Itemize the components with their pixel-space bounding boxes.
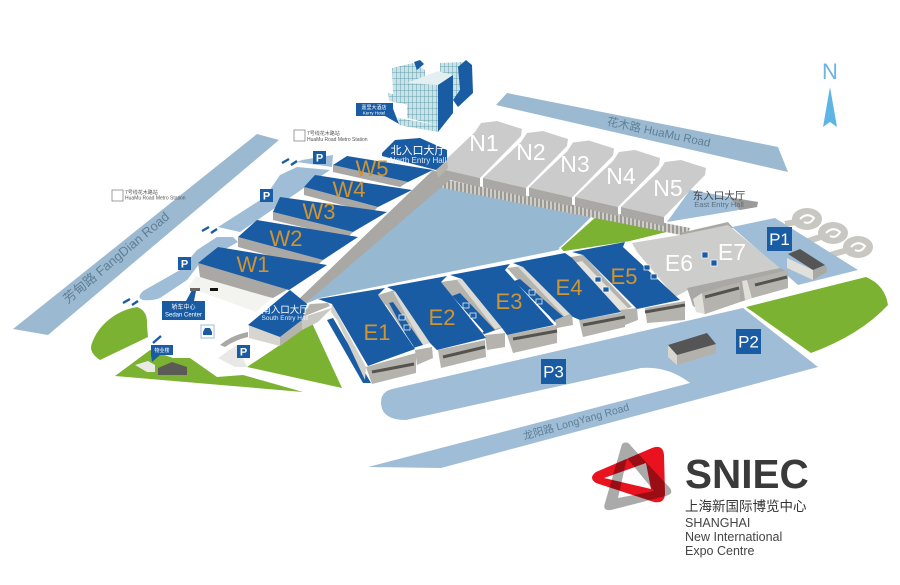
hotel label: 嘉里大酒店: [361, 104, 387, 111]
parking sign: west top: [313, 151, 326, 164]
south entry hall: South Entry Hall: [262, 315, 309, 322]
icon: north arrow: N: [822, 59, 838, 84]
halls: N1 to N5: N2: [516, 139, 546, 165]
halls: W1 to W5: W4: [332, 177, 366, 202]
green space: north triangle: [560, 215, 678, 252]
north entry hall: [382, 138, 448, 178]
parking sign: south: [237, 345, 250, 358]
logo Chinese name: 上海新国际博览中心: [685, 498, 807, 514]
metro label: HuaMu Road station west: [112, 189, 186, 202]
halls: W1 to W5: W3: [302, 199, 336, 224]
halls: N1 to N5: N3: [560, 151, 590, 177]
logo English name: Expo Centre: [685, 544, 755, 558]
south entry hall: [220, 290, 332, 347]
road: FangDian Road: 芳甸路 FangDian Road: [60, 209, 172, 306]
logo English name: [685, 516, 782, 558]
east entry hall: 东入口大厅: [693, 189, 745, 202]
halls: E6 and E7: [632, 222, 788, 314]
parking sign: west bottom: P: [181, 258, 188, 270]
roofs: [318, 242, 680, 366]
parking sign: P3: [541, 359, 566, 384]
halls: E1 to E5: E2: [429, 305, 455, 330]
parking area: P3 and P2 with LongYang Road: [368, 308, 818, 468]
building: P2 parking: [668, 333, 716, 365]
road: HuaMu Road: [496, 93, 788, 172]
metro label: HuaMu Road station north: [294, 130, 368, 143]
logo wordmark: SNIEC: [685, 451, 809, 497]
logo English name: New International: [685, 530, 782, 544]
north entry hall: 北入口大厅: [390, 143, 446, 157]
north entry hall: North Entry Hall: [390, 156, 446, 165]
loop ramps near P1: [785, 208, 873, 258]
halls: N1 to N5: [437, 121, 706, 226]
entrance signs on courtyards: [399, 252, 717, 330]
halls: E1 to E5: E5: [611, 264, 637, 289]
logo: SNIEC: [592, 442, 809, 558]
halls: N1 to N5: N5: [653, 175, 683, 201]
hotel label: [356, 103, 399, 124]
east entry hall: East Entry Hall: [694, 200, 744, 209]
courtyards: [378, 255, 632, 348]
central lake: [305, 185, 595, 304]
halls: W1 to W5: W5: [356, 156, 388, 181]
halls: W1 to W5: W2: [270, 226, 302, 251]
parking sign: P2: P2: [738, 332, 759, 352]
road: FangDian Road: [13, 134, 279, 335]
service forecourt: [188, 276, 272, 312]
label: sedan center: Sedan Center: [165, 312, 202, 318]
halls: E6 and E7: E7: [718, 239, 746, 265]
east entry hall: [667, 189, 758, 222]
halls: E1 to E5: E4: [556, 275, 582, 300]
halls: N1 to N5: N1: [469, 130, 499, 156]
logo English name: SHANGHAI: [685, 516, 750, 530]
halls: E1 to E5: E1: [364, 320, 390, 345]
halls: W1 to W5: W1: [236, 252, 270, 277]
south entry hall: 南入口大厅: [261, 304, 309, 316]
metro label: HuaMu Road station west: HuaMu Road Metro Station: [125, 196, 186, 202]
parking sign: P3: P3: [543, 362, 564, 382]
parking sign: P1: P1: [769, 230, 790, 249]
corridor: west: [300, 170, 452, 304]
parking sign: west top: P: [316, 152, 323, 164]
label: service building: 物业楼: [154, 347, 170, 354]
logo mark: [592, 442, 671, 510]
icon: car: [201, 325, 214, 338]
building: P1 parking: [787, 249, 827, 280]
metro label: HuaMu Road station north: 7号线花木路站: [307, 130, 340, 137]
parking sign: P2: [736, 329, 761, 354]
traffic arrows: [123, 159, 297, 343]
fronts: [366, 301, 685, 384]
metro label: HuaMu Road station north: HuaMu Road Metro Station: [307, 137, 368, 143]
parking sign: south: P: [240, 346, 247, 358]
parking pad: south: [218, 345, 247, 367]
halls: W1 to W5: [198, 156, 433, 298]
parking sign: west middle: [260, 189, 273, 202]
road: HuaMu Road: 花木路 HuaMu Road: [606, 114, 712, 150]
small service buildings: [135, 361, 187, 375]
halls: E1 to E5: E3: [496, 289, 522, 314]
metro label: HuaMu Road station west: 7号线花木路站: [125, 189, 158, 196]
halls: N1 to N5: N4: [606, 163, 636, 189]
green space: southeast: [746, 277, 888, 353]
hotel tower: [388, 60, 473, 132]
parking area: P1: [732, 218, 858, 285]
parking area: P3 and P2 with LongYang Road: 龙阳路 LongYang Road: [522, 401, 631, 443]
halls: E6 and E7: E6: [665, 250, 693, 276]
connectors: [415, 308, 638, 365]
parking sign: west bottom: [178, 257, 191, 270]
label: service building: [151, 345, 173, 362]
parking area: west side: [140, 155, 333, 300]
colonnade: north: [437, 178, 690, 236]
halls: E1 to E5: [318, 242, 685, 384]
hotel label: Kerry Hotel: [363, 110, 385, 116]
parking sign: west middle: P: [263, 190, 270, 202]
E1 side wall: [327, 304, 371, 383]
parking sign: P1: [767, 227, 792, 251]
icon: north arrow: [822, 59, 838, 127]
label: sedan center: [162, 288, 218, 320]
green space: southwest: [91, 307, 342, 392]
label: sedan center: 轿车中心: [171, 303, 196, 311]
